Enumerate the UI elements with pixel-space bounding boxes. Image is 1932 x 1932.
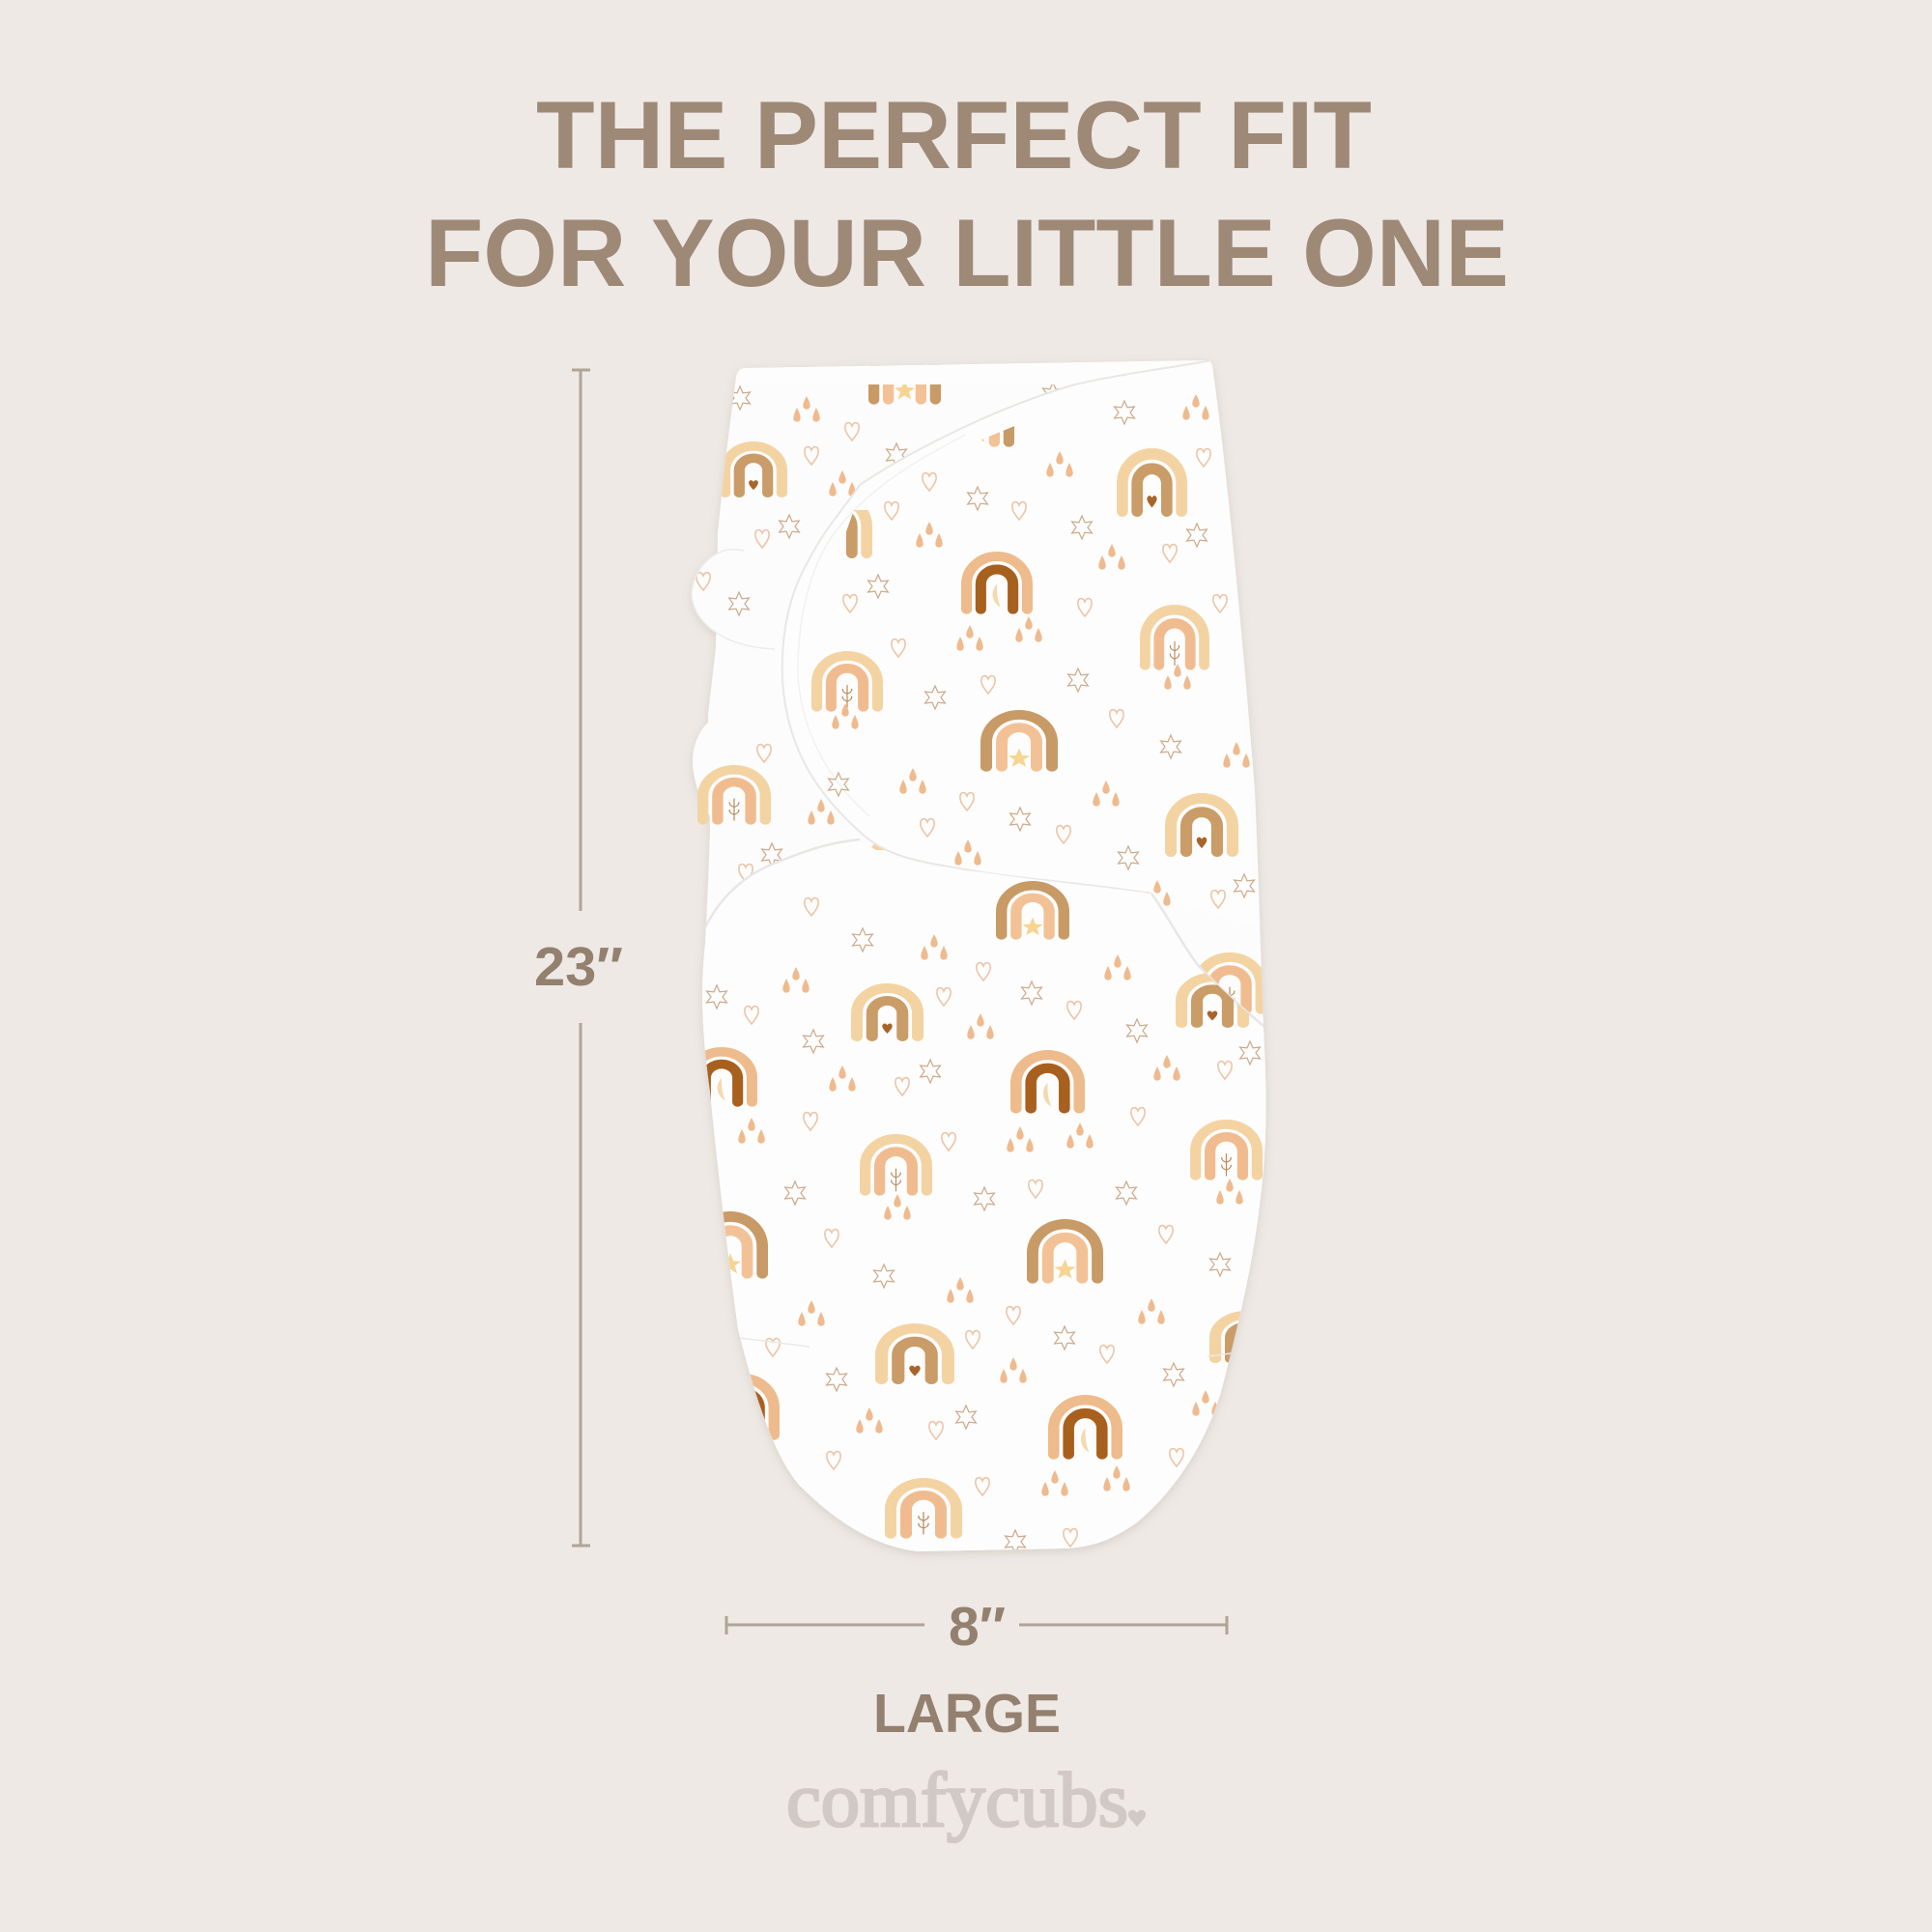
flap small prints xyxy=(829,394,1254,908)
garment silhouette with tabs xyxy=(692,360,1265,1551)
left tab prints xyxy=(692,550,775,821)
pocket print xyxy=(692,886,1277,1553)
height dimension marker: 23 inches: 23″ xyxy=(534,936,623,998)
hem-clipped rainbows xyxy=(846,426,1014,558)
title xyxy=(425,81,1509,306)
width dimension marker: 8 inches xyxy=(726,1596,1227,1658)
size label: LARGE xyxy=(873,1683,1061,1745)
swaddle garment xyxy=(690,360,1268,1557)
height dimension marker: 23 inches xyxy=(534,370,623,1546)
upper wrap flap xyxy=(782,360,1256,927)
title: THE PERFECT FIT xyxy=(536,81,1372,188)
back panel print xyxy=(725,345,1261,1009)
lower pocket panel xyxy=(702,838,1265,1551)
title: FOR YOUR LITTLE ONE xyxy=(425,199,1509,306)
width dimension marker: 8 inches: 8″ xyxy=(949,1596,1006,1658)
flap rainbows xyxy=(817,454,1233,852)
brand logo: comfycubs xyxy=(786,1758,1128,1843)
top neck band xyxy=(868,365,1055,384)
